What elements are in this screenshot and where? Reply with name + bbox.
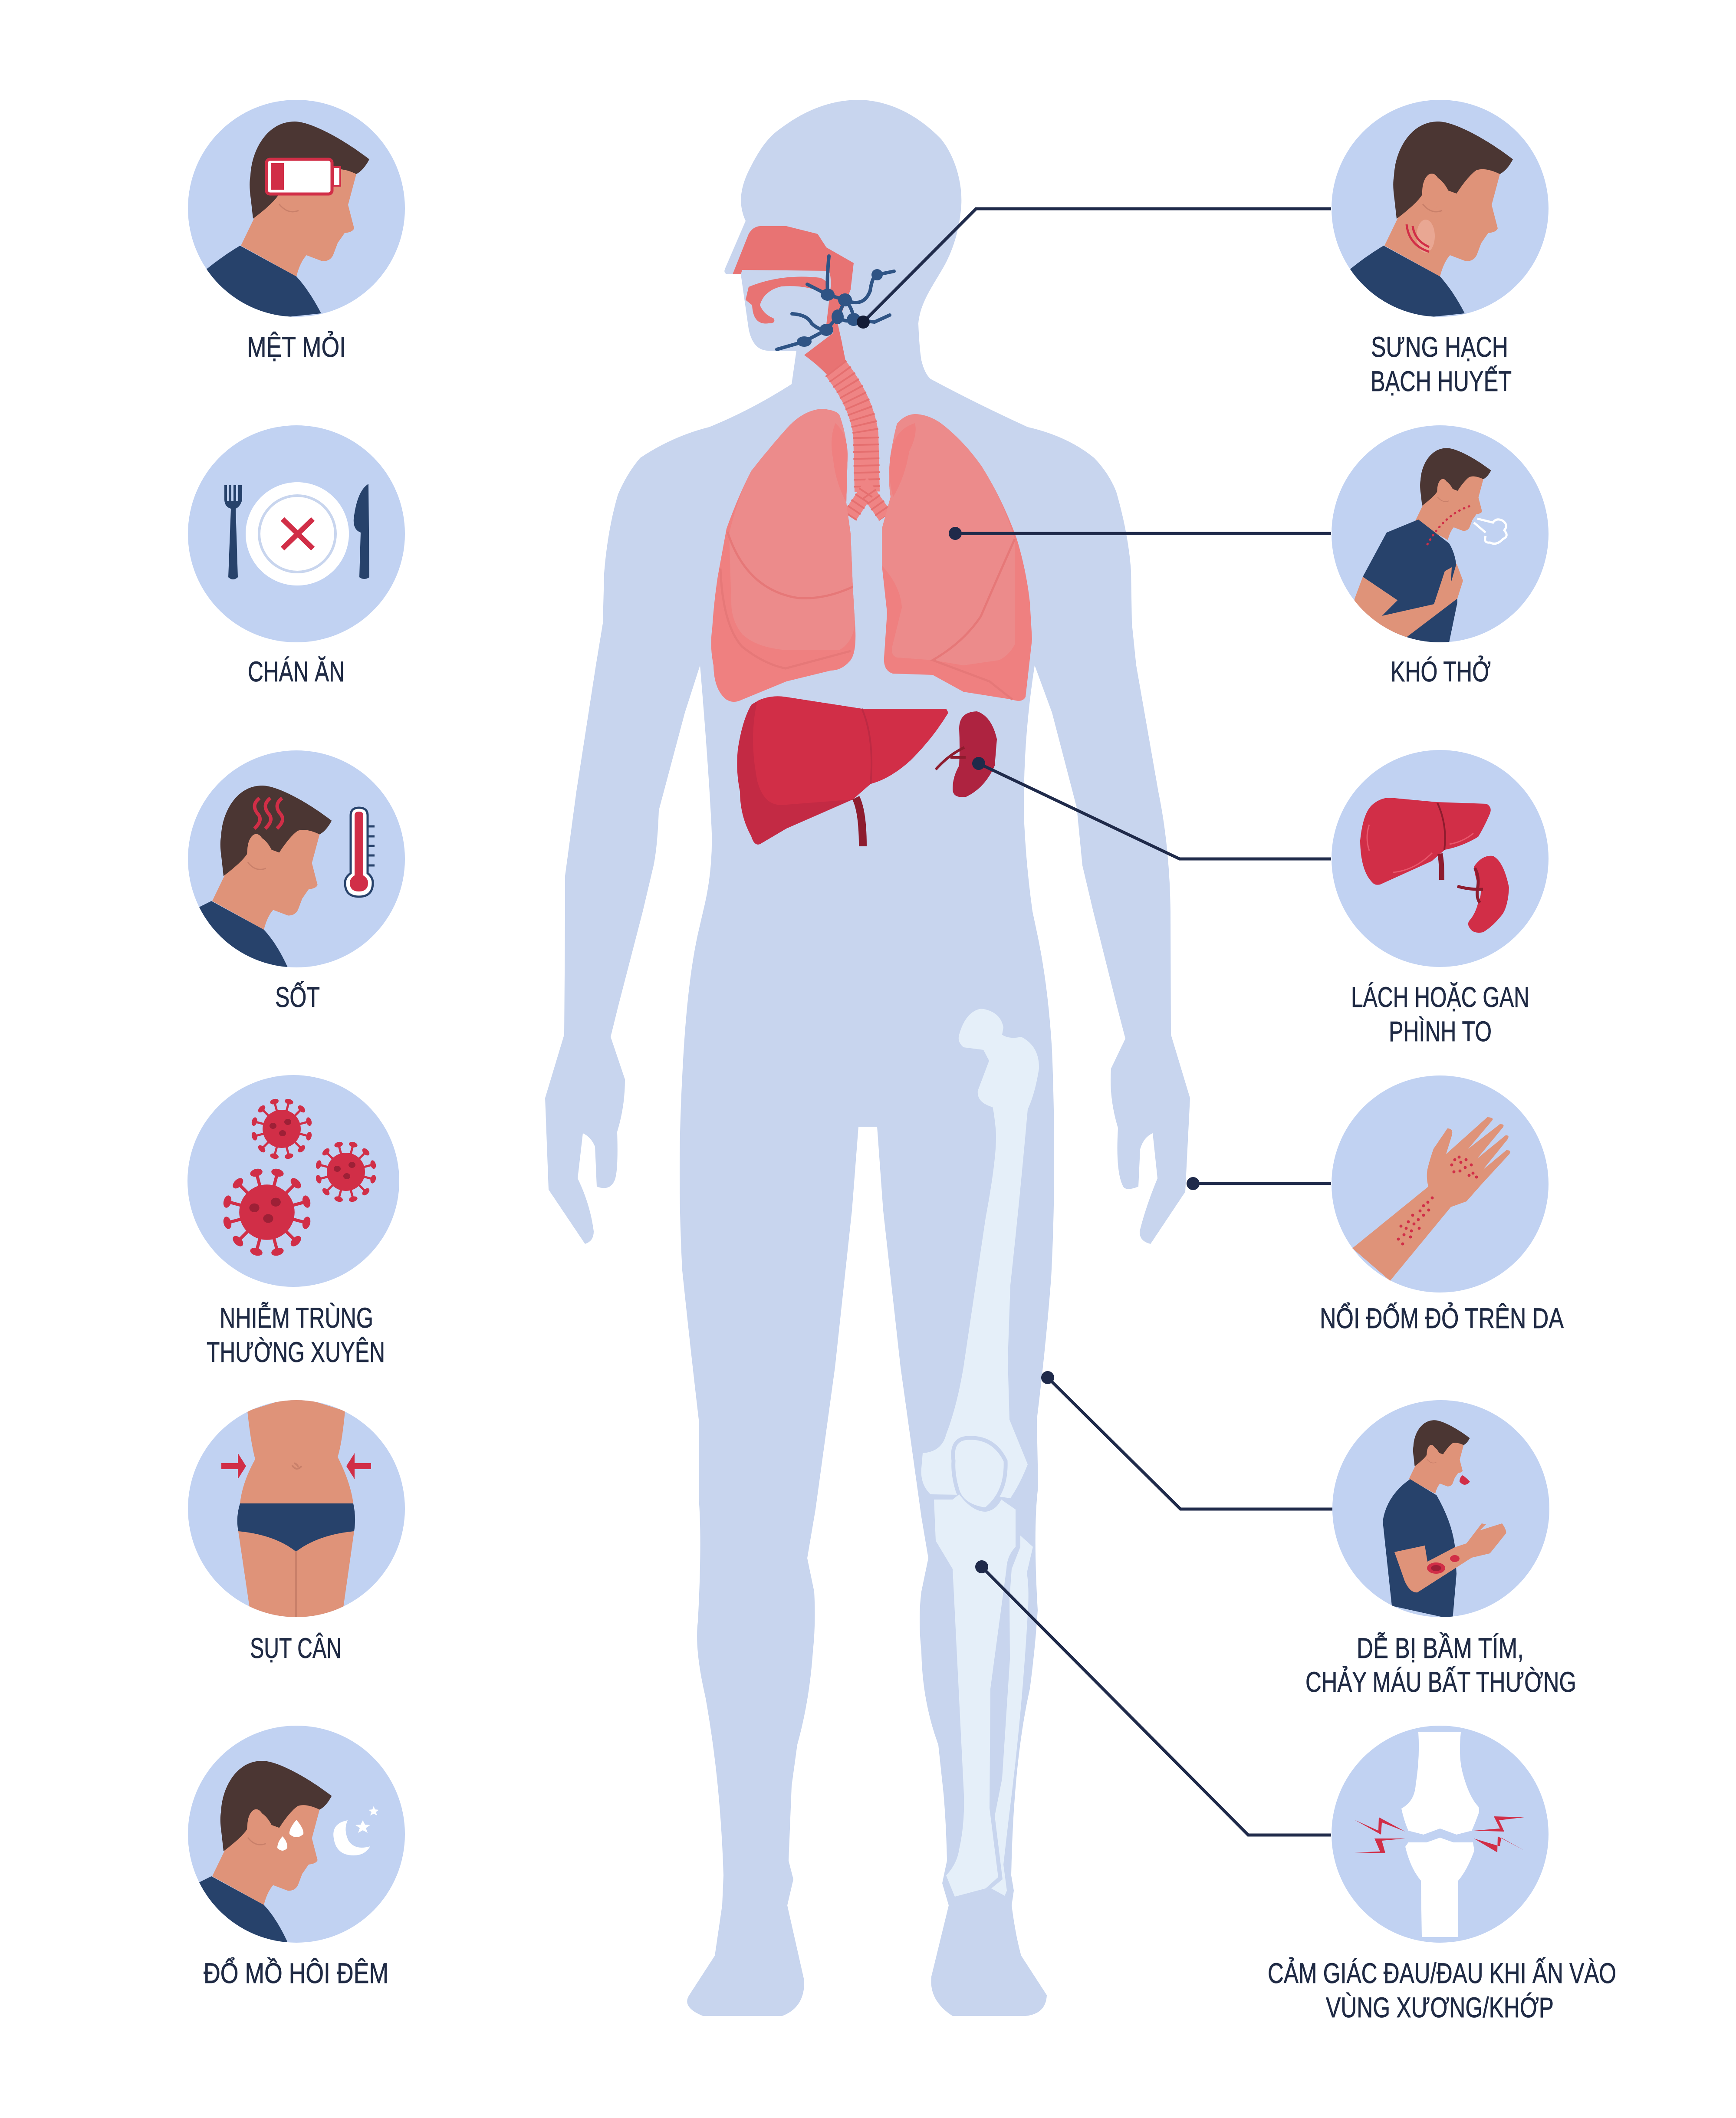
lymph nodes <box>777 256 894 349</box>
breath cloud <box>1474 519 1506 544</box>
icon: swollen lymph nodes <box>1332 100 1549 326</box>
icon: shortness of breath <box>1332 425 1549 647</box>
label: swollen lymph nodes: SƯNG HẠCH <box>1371 331 1508 363</box>
battery <box>266 159 340 194</box>
patella <box>953 1438 1006 1510</box>
respiratory tract <box>733 226 885 516</box>
icon: night sweats <box>188 1726 405 1951</box>
airway dots <box>1427 506 1470 544</box>
leader: skin <box>1187 1177 1331 1190</box>
knee bones <box>1401 1732 1479 1835</box>
label: night sweats: ĐỔ MỒ HÔI ĐÊM <box>204 1957 388 1989</box>
liver <box>1360 798 1491 885</box>
bruises <box>1427 1555 1460 1574</box>
icon: frequent infections <box>187 1075 399 1287</box>
throat <box>804 323 847 379</box>
arrows <box>221 1453 371 1479</box>
right lung <box>882 414 1032 701</box>
knife <box>354 484 369 579</box>
icon: enlarged spleen or liver <box>1332 750 1549 967</box>
icon: weight loss <box>188 1396 405 1621</box>
label: loss of appetite: CHÁN ĂN <box>248 655 345 687</box>
bronchi <box>850 490 885 516</box>
label: bone and joint pain <box>1268 1957 1616 2023</box>
moon and stars <box>333 1820 370 1855</box>
rash dots <box>1397 1155 1478 1246</box>
sweat drops <box>277 1820 303 1851</box>
left lung <box>711 409 855 702</box>
label: enlarged spleen or liver <box>1351 981 1529 1047</box>
leader: bruising <box>1041 1371 1332 1509</box>
label: frequent infections <box>207 1302 385 1368</box>
leader: lungs <box>949 527 1331 540</box>
trachea <box>835 368 867 492</box>
femur <box>921 1009 1039 1498</box>
plate <box>246 482 349 585</box>
leader: bone pain <box>975 1560 1331 1835</box>
leg bones <box>921 1009 1039 1897</box>
nasal cavity <box>733 226 854 343</box>
nosebleed drop <box>1460 1475 1470 1485</box>
label: frequent infections: THƯỜNG XUYÊN <box>207 1336 385 1368</box>
label: frequent infections: NHIỄM TRÙNG <box>220 1302 373 1334</box>
label: swollen lymph nodes <box>1371 331 1512 397</box>
pain bolts <box>1355 1816 1525 1853</box>
label: bruising and bleeding: DỄ BỊ BẦM TÍM, <box>1357 1632 1524 1664</box>
fibula <box>991 1536 1033 1896</box>
label: bruising and bleeding <box>1305 1632 1576 1698</box>
fork <box>224 485 242 579</box>
liver <box>737 696 948 846</box>
label: bone and joint pain: CẢM GIÁC ĐAU/ĐAU KHI ẤN VÀO <box>1268 1957 1616 1989</box>
human body silhouette <box>545 100 1190 2016</box>
portal vein <box>856 798 863 846</box>
label: shortness of breath: KHÓ THỞ <box>1391 655 1491 687</box>
label: red spots on skin: NỔI ĐỐM ĐỎ TRÊN DA <box>1320 1302 1564 1334</box>
icon: fever <box>188 750 405 976</box>
icon: bruising and bleeding <box>1332 1400 1549 1619</box>
spleen <box>936 711 997 797</box>
swelling <box>1407 220 1435 253</box>
heat waves <box>254 798 283 829</box>
label: swollen lymph nodes: BẠCH HUYẾT <box>1371 365 1512 397</box>
icon: bone and joint pain <box>1332 1726 1549 1943</box>
spleen <box>1468 856 1509 933</box>
label: enlarged spleen or liver: PHÌNH TO <box>1389 1015 1492 1047</box>
icon: red spots on skin <box>1332 1075 1549 1293</box>
tibia <box>934 1494 1016 1897</box>
label: fever: SỐT <box>275 981 320 1013</box>
icon: fatigue <box>188 100 405 326</box>
label: enlarged spleen or liver: LÁCH HOẶC GAN <box>1351 981 1529 1013</box>
thermometer <box>345 808 375 897</box>
label: weight loss: SỤT CÂN <box>250 1632 342 1664</box>
label: fatigue: MỆT MỎI <box>247 331 346 363</box>
icon: loss of appetite <box>188 425 405 642</box>
leader: spleen and liver <box>972 757 1331 859</box>
label: bone and joint pain: VÙNG XƯƠNG/KHỚP <box>1326 1991 1554 2023</box>
leader: lymph nodes <box>857 209 1331 329</box>
oral cavity <box>746 277 829 323</box>
label: bruising and bleeding: CHẢY MÁU BẤT THƯỜNG <box>1305 1666 1576 1698</box>
